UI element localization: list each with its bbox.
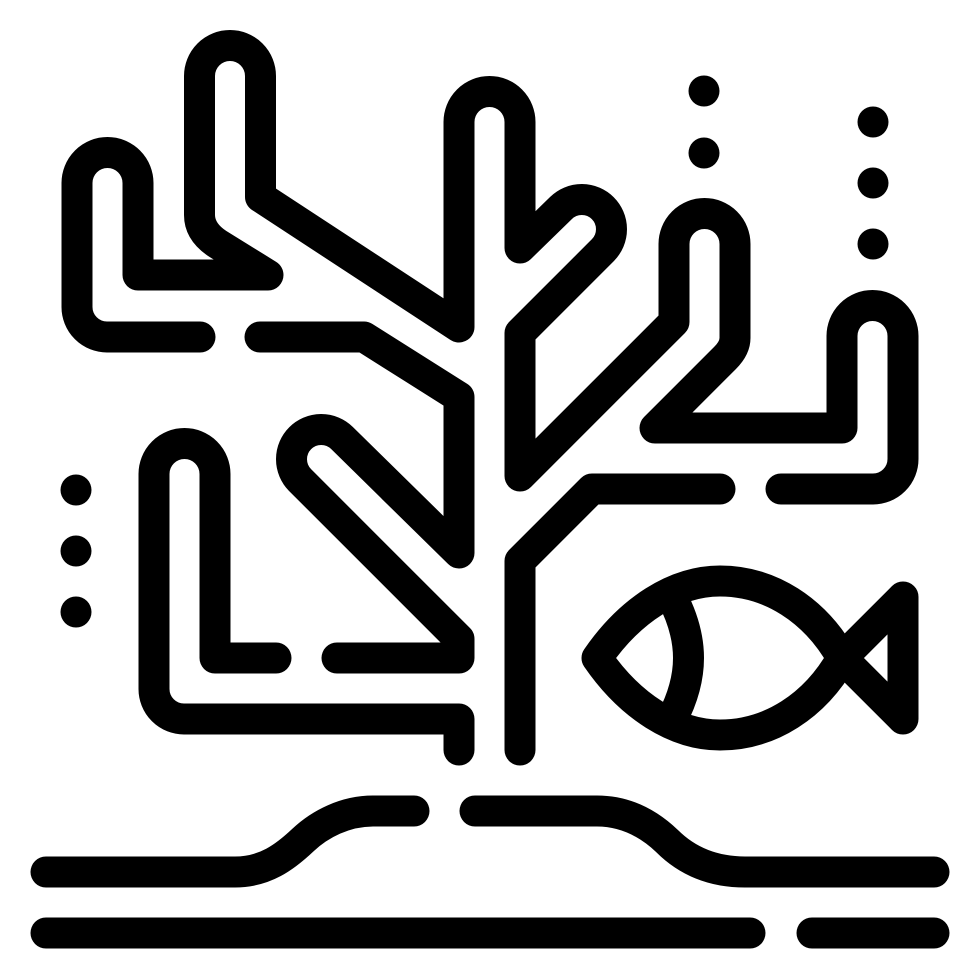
coral: lower left branch bbox=[154, 444, 459, 750]
coral: upper branches bbox=[77, 45, 903, 489]
icon: fish bbox=[597, 581, 903, 735]
fish gill bbox=[672, 597, 688, 719]
coral: trunk and right branch bbox=[520, 489, 720, 750]
coral: middle left branch bbox=[260, 337, 459, 658]
bubbles: upper right bbox=[858, 106, 888, 260]
fish body bbox=[597, 581, 842, 735]
bubbles: upper middle bbox=[688, 76, 720, 168]
bubbles: left bbox=[60, 474, 92, 628]
fish tail bbox=[842, 597, 903, 719]
seabed: bottom line bbox=[46, 918, 934, 948]
seabed: mound bbox=[46, 811, 934, 872]
